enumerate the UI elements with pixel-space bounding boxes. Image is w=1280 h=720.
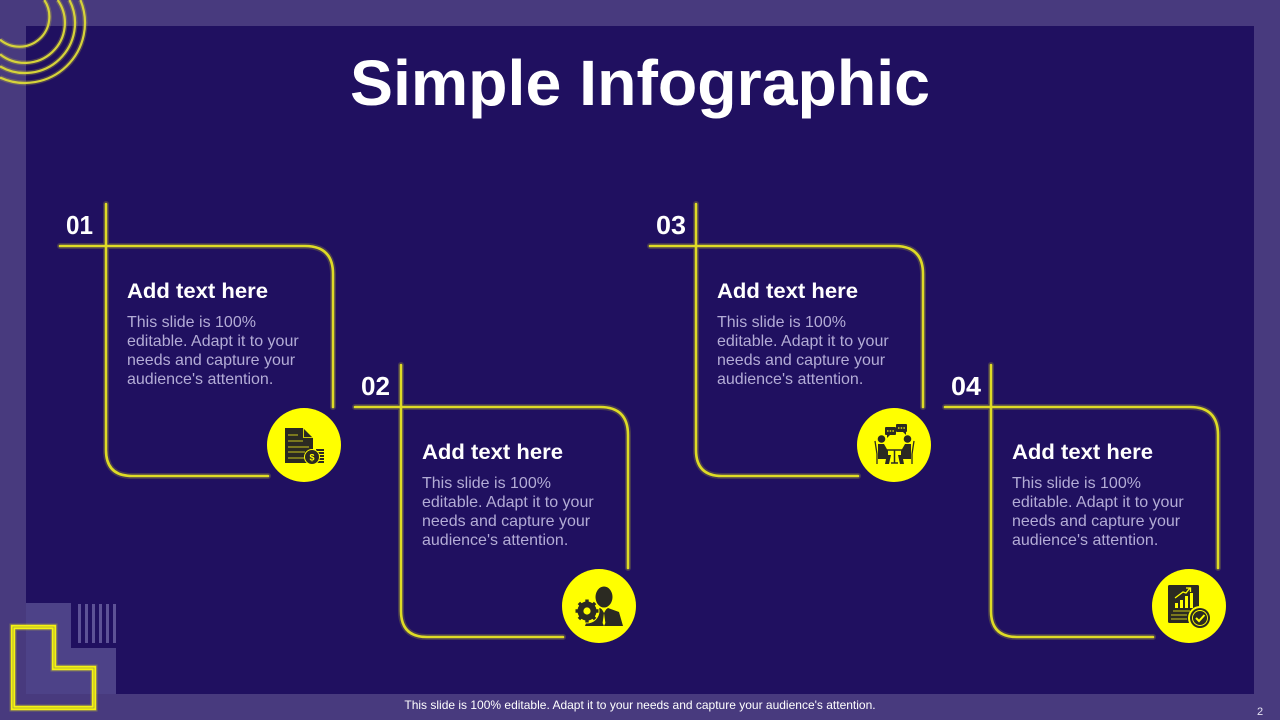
icon: document with coins — [267, 408, 341, 482]
icon: document with coins: $ — [309, 452, 315, 462]
footer note: This slide is 100% editable. Adapt it to your needs and capture your audience's attention. — [404, 698, 876, 712]
step number 02: 02 — [361, 371, 390, 401]
body text 04: editable. Adapt it to your — [1012, 494, 1184, 511]
heading 02: Add text here — [422, 441, 563, 464]
icon: two people talking at table — [857, 408, 931, 482]
decoration: concentric neon arcs — [0, 0, 85, 83]
heading 01: Add text here — [127, 280, 268, 303]
body text 03: audience's attention. — [717, 371, 863, 388]
step number 01: 01 — [66, 210, 93, 240]
body text 02: needs and capture your — [422, 513, 591, 530]
heading 04: Add text here — [1012, 441, 1153, 464]
title: Simple Infographic — [350, 47, 930, 119]
body text 04: needs and capture your — [1012, 513, 1181, 530]
body text 03: editable. Adapt it to your — [717, 333, 889, 350]
body text 03: needs and capture your — [717, 352, 886, 369]
icon: businessman with gear — [562, 569, 636, 643]
step number 04: 04 — [951, 371, 982, 401]
body text 02: editable. Adapt it to your — [422, 494, 594, 511]
body text 04: This slide is 100% — [1012, 475, 1141, 492]
heading 03: Add text here — [717, 280, 858, 303]
panel: step 02 — [355, 365, 636, 643]
body text 01: editable. Adapt it to your — [127, 333, 299, 350]
body text 04: audience's attention. — [1012, 532, 1158, 549]
icon: report chart with check badge — [1152, 569, 1226, 643]
body text 02: audience's attention. — [422, 532, 568, 549]
body text 01: This slide is 100% — [127, 314, 256, 331]
body text 03: This slide is 100% — [717, 314, 846, 331]
body text 01: needs and capture your — [127, 352, 296, 369]
body text 02: This slide is 100% — [422, 475, 551, 492]
decoration: bottom-left L shape with stripes — [13, 603, 116, 708]
body text 01: audience's attention. — [127, 371, 273, 388]
step number 03: 03 — [656, 210, 686, 240]
panel: step 03 — [650, 204, 931, 482]
panel: step 01 — [60, 204, 341, 482]
page number: 2 — [1257, 706, 1263, 718]
panel: step 04 — [945, 365, 1226, 643]
